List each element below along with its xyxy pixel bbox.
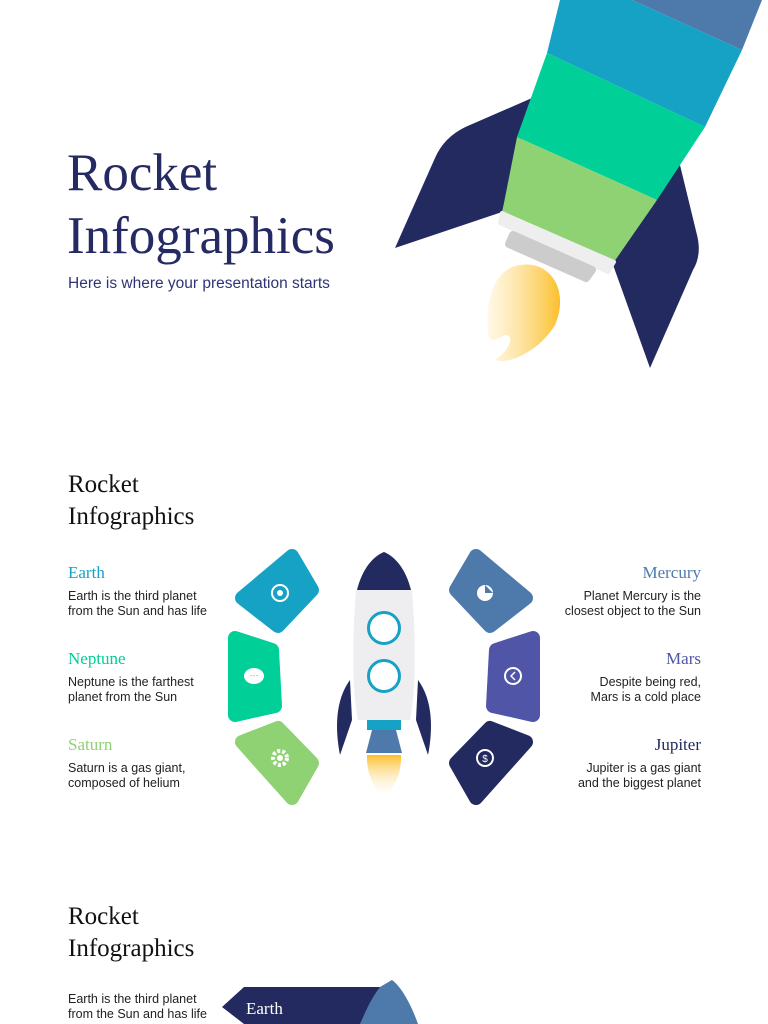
item: Jupiter (578, 735, 701, 790)
item: Saturn: Saturn is a gas giant, composed of helium (68, 761, 185, 790)
panel: slate pie (456, 556, 526, 626)
banner: Earth (222, 980, 418, 1024)
section 2 heading (68, 471, 194, 530)
item: Jupiter: Jupiter (655, 735, 701, 754)
section 2 heading: Infographics (68, 503, 194, 530)
section 3 heading: Rocket (68, 903, 139, 930)
panel: navy dollar: $ (482, 754, 488, 765)
panel: purple clock (493, 638, 533, 715)
text: Earth description: Earth is the third planet from the Sun and has life (68, 992, 207, 1021)
banner: Earth: Earth (246, 999, 283, 1018)
item: Saturn (68, 735, 185, 790)
item: Mercury: Mercury (642, 563, 701, 582)
panel: green chat (235, 638, 275, 715)
item: Saturn: Saturn (68, 735, 112, 754)
section 3 heading (68, 903, 194, 962)
rocket diagram with icon panels (228, 549, 540, 805)
item: Jupiter: Jupiter is a gas giant and the biggest planet (578, 761, 701, 790)
panel: cyan target (242, 556, 312, 626)
item: Neptune: Neptune (68, 649, 126, 668)
panel: light green gear (242, 728, 312, 798)
panel: navy dollar (456, 728, 526, 798)
small rocket (337, 552, 431, 800)
item: Earth: Earth is the third planet from the Sun and has life (68, 589, 207, 618)
subtitle: Here is where your presentation starts (68, 275, 330, 292)
item: Neptune: Neptune is the farthest planet from the Sun (68, 675, 194, 704)
item: Mars: Despite being red, Mars is a cold place (591, 675, 701, 704)
item: Neptune (68, 649, 194, 704)
section 3 heading: Infographics (68, 935, 194, 962)
panel: green chat: ··· (250, 670, 258, 680)
item: Mercury (565, 563, 701, 618)
item: Mercury: Planet Mercury is the closest object to the Sun (565, 589, 701, 618)
item: Mars (591, 649, 701, 704)
item: Mars: Mars (666, 649, 701, 668)
title (67, 144, 335, 265)
title: Infographics (67, 207, 335, 265)
title: Rocket (67, 144, 217, 202)
item: Earth: Earth (68, 563, 105, 582)
big rocket illustration (395, 0, 762, 368)
section 2 heading: Rocket (68, 471, 139, 498)
item: Earth (68, 563, 207, 618)
